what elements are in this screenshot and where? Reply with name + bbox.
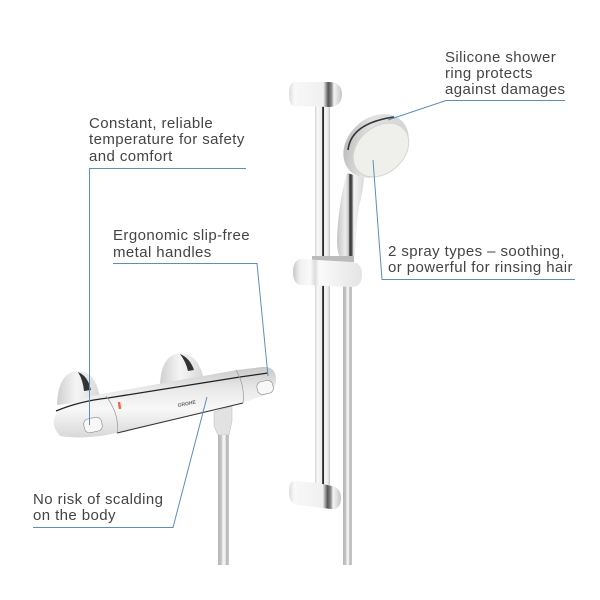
callout: handles: metal handles	[113, 244, 212, 261]
callout: spray types: or powerful for rinsing hair	[388, 259, 573, 276]
temperature scale	[119, 402, 120, 409]
rail top bracket	[289, 82, 342, 107]
left button	[83, 416, 103, 434]
callout: temperature: and comfort	[89, 148, 173, 165]
callout: silicone ring: Silicone shower	[445, 49, 556, 66]
callout: scalding	[33, 397, 207, 528]
lower dark reflection	[117, 403, 243, 433]
callout: silicone ring: against damages	[445, 81, 565, 98]
right button	[256, 379, 274, 396]
callout: scalding: No risk of scalding	[33, 491, 163, 508]
upper dark reflection	[56, 373, 268, 411]
seams	[106, 370, 243, 433]
callout: temperature	[89, 115, 246, 425]
thermostat wall domes	[57, 353, 204, 405]
callout: spray types: 2 spray types – soothing,	[388, 243, 565, 260]
head ring	[331, 101, 421, 191]
hose connector	[214, 406, 232, 435]
callout: temperature: Constant, reliable	[89, 115, 213, 132]
callout: temperature: temperature for safety	[89, 131, 245, 148]
callout: scalding: on the body	[33, 507, 116, 524]
logo mark: GROHE	[177, 399, 197, 409]
rail middle bracket	[293, 256, 362, 287]
left hose	[218, 435, 229, 565]
rail bottom bracket	[289, 481, 341, 509]
thermostat body	[54, 367, 276, 437]
callout: handles	[113, 227, 268, 376]
slide rail	[315, 100, 330, 485]
callout: silicone ring: ring protects	[445, 65, 533, 82]
callout: handles: Ergonomic slip-free	[113, 227, 250, 244]
spray face	[343, 112, 419, 188]
shower head	[331, 101, 421, 191]
wall hose	[343, 285, 352, 565]
callout: silicone ring	[388, 49, 565, 120]
callout: spray types	[373, 160, 575, 280]
shower handle	[337, 173, 364, 257]
